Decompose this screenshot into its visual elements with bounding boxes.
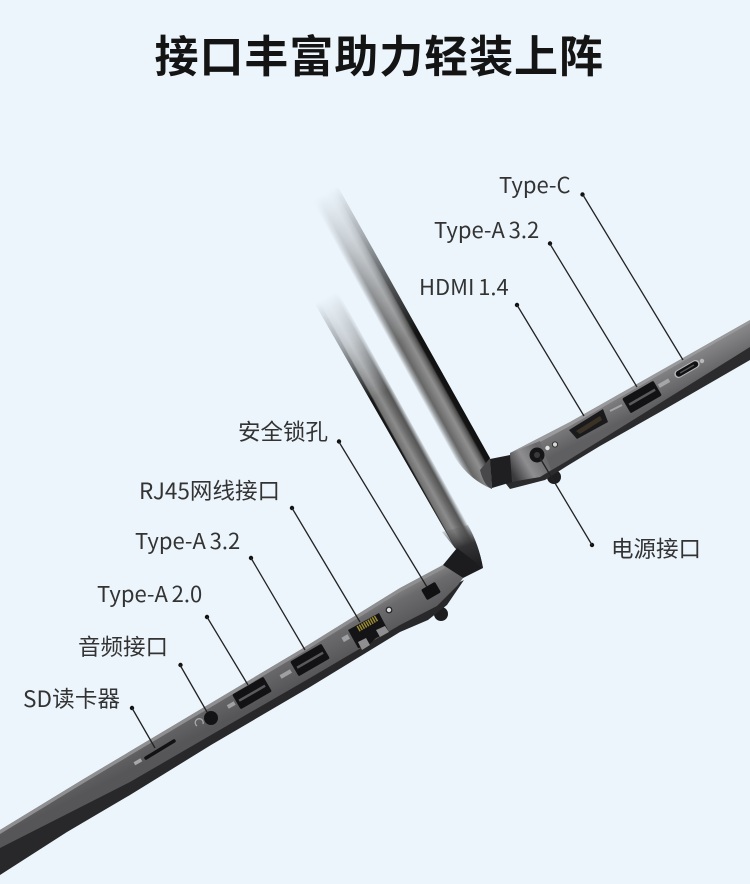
indicator light [386, 607, 392, 613]
port: power jack [530, 448, 544, 462]
laptop: right side view [303, 185, 750, 489]
label: audio: 音频接口 [78, 630, 168, 662]
lid [307, 290, 483, 568]
label: Type-A 3.2 right: Type-A 3.2 [434, 213, 539, 245]
label: Type-A 3.2 left [135, 524, 305, 650]
label: Type-A 3.2 left: Type-A 3.2 [135, 524, 240, 556]
label: SD reader: SD读卡器 [23, 682, 120, 714]
indicator lights [545, 442, 558, 450]
port: HDMI [569, 405, 622, 439]
base dark underside [0, 580, 464, 875]
base side face [0, 565, 463, 848]
label: HDMI 1.4 [419, 270, 584, 416]
hinge [490, 455, 512, 488]
port: USB 3.2 [622, 374, 674, 413]
lid [322, 192, 492, 489]
label: RJ45 [139, 474, 360, 622]
label: SD reader [23, 682, 155, 748]
hinge [443, 548, 483, 578]
rear foot [547, 470, 561, 484]
port: security lock [421, 582, 441, 600]
port: USB-C [673, 359, 701, 379]
label: Type-A 3.2 right [434, 213, 637, 387]
label: power port [540, 458, 701, 564]
label: Type-A 2.0 [97, 577, 248, 685]
label: Type-C [499, 168, 683, 360]
label: RJ45: RJ45网线接口 [139, 474, 280, 506]
label: security lock: 安全锁孔 [238, 415, 328, 447]
usb-c logo [700, 359, 704, 363]
port: RJ45 [341, 613, 389, 650]
label: Type-C: Type-C [499, 168, 571, 200]
base side face [510, 320, 750, 482]
label: security lock [238, 415, 427, 587]
base dark underside [503, 345, 750, 489]
rear foot [434, 607, 448, 621]
laptop: left side view [0, 290, 483, 875]
port: USB 2.0 [224, 677, 272, 714]
port: SD card slot [134, 741, 174, 765]
label: audio [78, 630, 207, 712]
label: HDMI 1.4: HDMI 1.4 [419, 270, 509, 302]
label: Type-A 2.0: Type-A 2.0 [97, 577, 202, 609]
port: USB 3.2 [276, 644, 330, 684]
port: audio jack [195, 711, 218, 726]
title: 接口丰富助力轻装上阵 [154, 21, 603, 85]
label: power port: 电源接口 [611, 532, 701, 564]
